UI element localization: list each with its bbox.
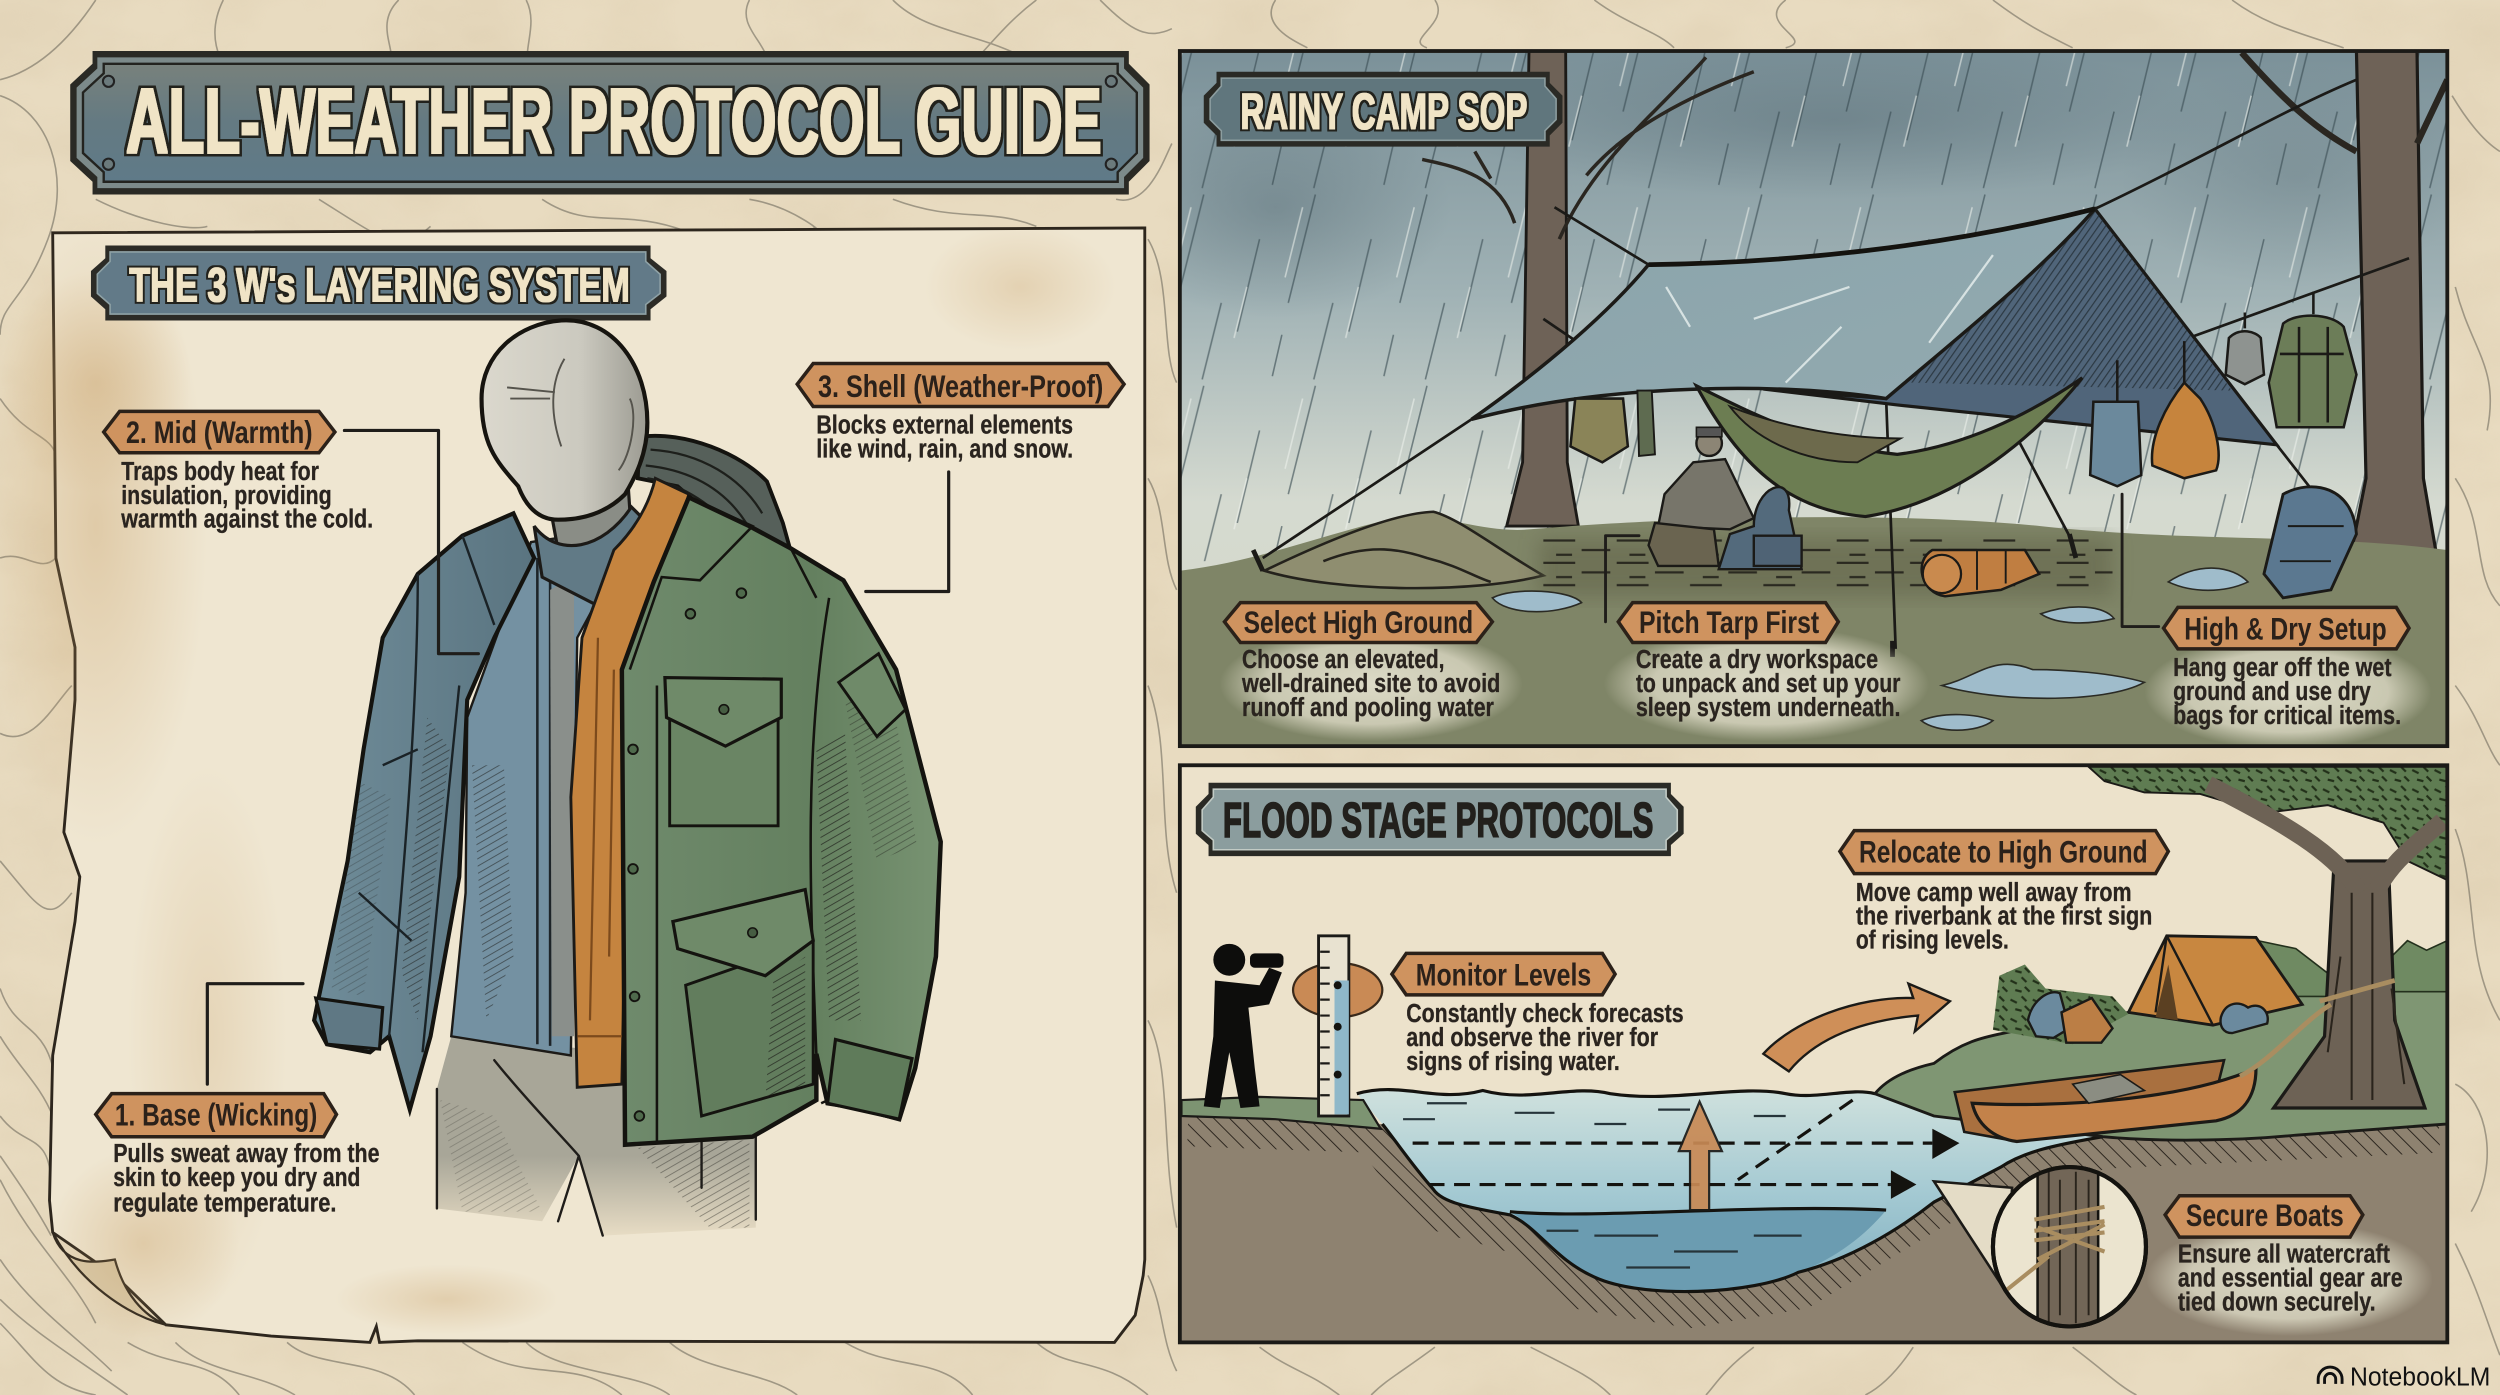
- callout: monitor levels: [1392, 953, 1684, 1076]
- callout: 1. Base (Wicking): regulate temperature.: [113, 1190, 336, 1218]
- callout: 2. Mid (Warmth): warmth against the cold.: [120, 506, 373, 534]
- left hanging pack: [1570, 399, 1628, 462]
- shirt: [451, 526, 638, 1055]
- callout: 3. Shell (Weather-Proof): 3. Shell (Weather-Proof): [818, 368, 1103, 404]
- callout: select high ground: [1224, 603, 1500, 722]
- callout: 1. Base (Wicking): skin to keep you dry and: [113, 1164, 360, 1192]
- left side of shell: [314, 513, 534, 1110]
- callout: 2. Mid (Warmth): Traps body heat for: [121, 458, 319, 486]
- callout: select high ground: Choose an elevated,: [1242, 646, 1445, 674]
- callout: monitor levels: Monitor Levels: [1416, 956, 1591, 992]
- river: [1357, 1090, 2103, 1292]
- hanging dry bags and pack: [2090, 292, 2356, 486]
- panel: flood stage protocols: [1180, 765, 2447, 1342]
- watermark: NotebookLM: NotebookLM: [2350, 1363, 2490, 1391]
- person kneeling with bag: [1649, 427, 1802, 569]
- callout: 2. Mid (Warmth): insulation, providing: [121, 482, 332, 510]
- leader line: shell: [866, 472, 949, 591]
- heading: the 3 W's layering system: THE 3 W's LAYERING SYSTEM: [129, 259, 630, 312]
- callout: secure boats: and essential gear are: [2178, 1265, 2403, 1293]
- inset: tied knot: [1993, 1164, 2146, 1330]
- callout: 2. Mid (Warmth): [104, 411, 373, 534]
- right bank hill: [1875, 980, 2447, 1140]
- callout: 1. Base (Wicking): [96, 1094, 380, 1218]
- leader arrow: pitch tarp: [1606, 536, 1639, 622]
- heading: rainy camp sop: RAINY CAMP SOP: [1240, 83, 1527, 140]
- sleeve pocket: [839, 654, 906, 737]
- lower pocket: [686, 941, 813, 1116]
- callout: pitch tarp first: [1618, 603, 1901, 722]
- rising arrow: [1679, 1102, 1722, 1210]
- left tree: [1507, 51, 1578, 526]
- ground cross-section: [1180, 1116, 2447, 1342]
- hammock: [1696, 378, 2082, 517]
- green shell body: [622, 497, 941, 1145]
- tarp main: [1472, 209, 2095, 419]
- callout: high and dry setup: High & Dry Setup: [2184, 610, 2387, 646]
- inset wedge: [1934, 1181, 2012, 1291]
- callout: high and dry setup: ground and use dry: [2173, 678, 2371, 706]
- callout: pitch tarp first: to unpack and set up your: [1636, 670, 1901, 698]
- leader line: base: [207, 984, 303, 1084]
- callout: 3. Shell (Weather-Proof): Blocks external elements: [816, 412, 1073, 440]
- callout: high and dry setup: [2164, 607, 2409, 730]
- callout: high and dry setup: Hang gear off the wet: [2173, 654, 2392, 682]
- canoes: [1955, 1060, 2224, 1140]
- heading: flood stage protocols: [1196, 783, 1684, 856]
- sleeping rolls: [1922, 550, 2039, 596]
- callout: 3. Shell (Weather-Proof): like wind, rain, and snow.: [816, 436, 1073, 464]
- tree: [2274, 861, 2425, 1108]
- gauge disc: [1293, 963, 1382, 1017]
- canopy: [2089, 767, 2447, 880]
- callout: monitor levels: signs of rising water.: [1406, 1048, 1620, 1076]
- upper chest pocket: [670, 701, 778, 826]
- heading: rainy camp sop: [1204, 72, 1562, 147]
- callout: monitor levels: Constantly check forecasts: [1406, 1000, 1684, 1028]
- panel frame: [1180, 765, 2447, 1342]
- distant bushes: [2258, 941, 2447, 996]
- panel frame: [1180, 51, 2447, 746]
- rainy scene illustration: [1182, 52, 2446, 744]
- guy lines and ropes: [1263, 80, 2409, 649]
- collar: [534, 507, 651, 606]
- callout: relocate to high ground: the riverbank at the first sign: [1856, 903, 2152, 931]
- dashed water levels: [1413, 1100, 1932, 1185]
- puddles: [1492, 591, 1582, 612]
- leader line: high and dry: [2122, 494, 2159, 627]
- callout: pitch tarp first: Pitch Tarp First: [1639, 604, 1819, 640]
- backpack on ground: [2264, 487, 2356, 598]
- jacket figure illustration: [314, 320, 941, 1236]
- paper sheet: [50, 228, 1145, 1342]
- camp gear: [1993, 965, 2128, 1044]
- ground: [1180, 517, 2447, 746]
- bank hatching: [1188, 1129, 2439, 1311]
- relocate arrow: [1763, 984, 1950, 1071]
- callout: high and dry setup: bags for critical items.: [2173, 702, 2401, 730]
- text halos: [1224, 644, 1518, 740]
- head: [550, 462, 631, 550]
- callout: relocate to high ground: [1840, 831, 2168, 955]
- leader line: mid: [344, 430, 478, 654]
- callout: relocate to high ground: Relocate to High Ground: [1859, 834, 2148, 870]
- callout: secure boats: [2165, 1196, 2403, 1317]
- title text: ALL-WEATHER PROTOCOL GUIDE: [126, 69, 1102, 173]
- callout: relocate to high ground: of rising levels.: [1856, 927, 2009, 955]
- callout: pitch tarp first: Create a dry workspace: [1636, 646, 1878, 674]
- callout: pitch tarp first: sleep system underneath.: [1636, 694, 1900, 722]
- river gauge: [1319, 936, 1349, 1116]
- tent: [2128, 936, 2302, 1025]
- panel: rainy camp SOP: [1100, 40, 2471, 749]
- pants: [437, 1036, 756, 1236]
- text halo: [2146, 1221, 2433, 1336]
- title plaque: [70, 51, 1150, 195]
- right tree: [2354, 52, 2438, 549]
- callout: 3. Shell (Weather-Proof): [797, 363, 1124, 464]
- callout: secure boats: Ensure all watercraft: [2178, 1241, 2390, 1269]
- callout: secure boats: tied down securely.: [2178, 1289, 2376, 1317]
- callout: relocate to high ground: Move camp well away from: [1856, 879, 2132, 907]
- callout: 1. Base (Wicking): 1. Base (Wicking): [115, 1097, 317, 1133]
- callout: 2. Mid (Warmth): 2. Mid (Warmth): [126, 414, 313, 450]
- heading: the 3 W's layering system: [91, 246, 666, 320]
- callout: secure boats: Secure Boats: [2186, 1197, 2344, 1233]
- callout: select high ground: runoff and pooling water: [1242, 694, 1494, 722]
- left bank grass: [1181, 1097, 1381, 1129]
- callout: monitor levels: and observe the river for: [1406, 1024, 1658, 1052]
- mid layer orange: [571, 478, 689, 1087]
- hood: [638, 436, 791, 552]
- callout: select high ground: Select High Ground: [1244, 604, 1473, 640]
- panel: 3 W's layering system: [0, 207, 1145, 1342]
- callout: 1. Base (Wicking): Pulls sweat away from the: [113, 1140, 380, 1168]
- flood scene illustration: [1180, 765, 2447, 1342]
- callout: select high ground: well-drained site to avoid: [1241, 670, 1500, 698]
- heading: flood stage protocols: FLOOD STAGE PROTOCOLS: [1223, 793, 1653, 848]
- tarp dark side: [1763, 209, 2277, 445]
- silhouette with binoculars: [1204, 944, 1283, 1108]
